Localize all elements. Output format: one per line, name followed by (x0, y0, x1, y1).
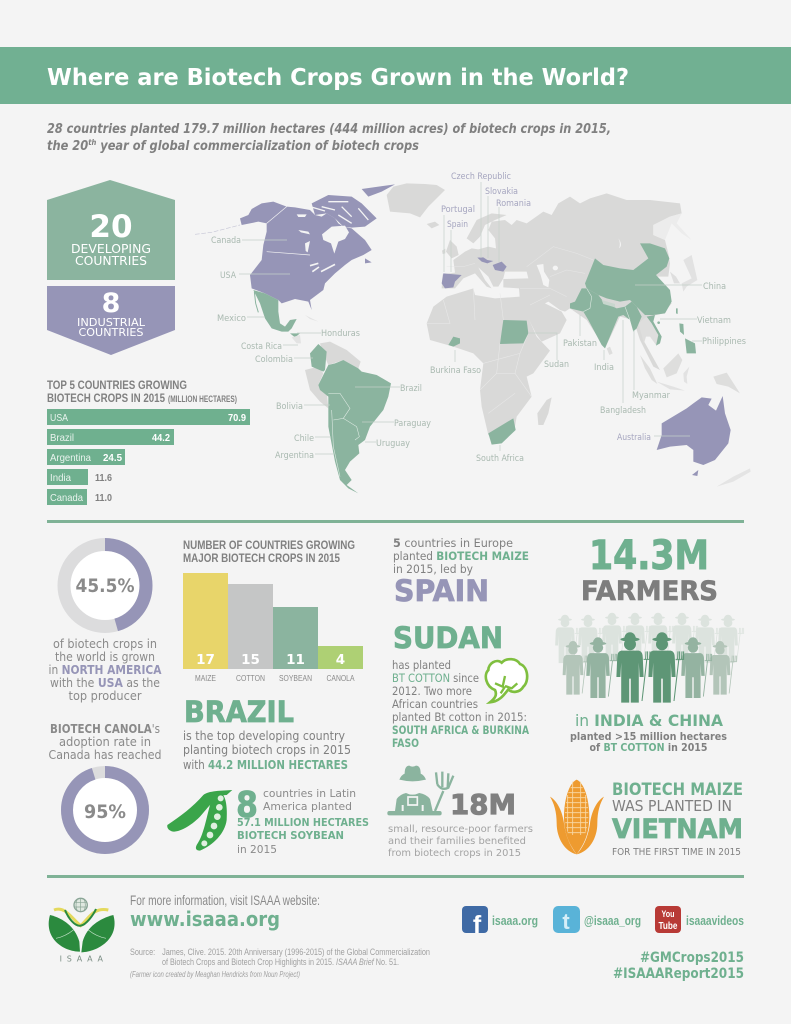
bar chart: top 5 countries: India (50, 472, 71, 484)
bar chart: top 5 countries: 24.5 (103, 452, 122, 464)
badge: developing countries (47, 180, 175, 280)
text: biotech canola: BIOTECH CANOLA's (50, 722, 160, 736)
callout: sudan: SUDAN (393, 621, 503, 655)
text: india and china (570, 711, 727, 754)
callout: 18M farmers: from biotech crops in 2015 (388, 848, 521, 859)
map: country labels: Colombia (255, 355, 293, 365)
heading: crops chart: NUMBER OF COUNTRIES GROWING (183, 538, 355, 552)
map: north america (195, 184, 395, 343)
icon: youtube: You (662, 909, 674, 919)
bar chart: top 5 countries: 70.9 (228, 412, 246, 424)
callout: 14.3M farmers: FARMERS (581, 576, 718, 607)
title banner: Where are Biotech Crops Grown in the World? (47, 63, 629, 91)
bar chart: crops: 15 (241, 652, 260, 668)
hashtags (613, 950, 744, 982)
icon: twitter (553, 906, 580, 934)
map: africa (427, 288, 751, 487)
map: south america (305, 342, 391, 493)
subtitle (47, 121, 611, 154)
footer: website (130, 892, 320, 931)
label: twitter: @isaaa_org (584, 913, 641, 928)
callout: 8 countries latin america: BIOTECH SOYBEAN (237, 829, 344, 842)
bar chart: crops: CANOLA (326, 673, 355, 683)
map: country labels: USA (220, 271, 236, 281)
hashtags: #ISAAAReport2015 (613, 966, 744, 982)
subtitle: th (88, 138, 97, 147)
callout: 18M farmers: 18M (450, 788, 516, 821)
map: country labels: Burkina Faso (430, 366, 481, 376)
map: africa biotech countries (448, 320, 528, 445)
badge: developing countries: COUNTRIES (75, 254, 147, 268)
callout: 8 countries latin america: 57.1 MILLION HECTARES (237, 816, 369, 829)
bar chart: top 5 countries: Argentina (50, 452, 91, 464)
heading: top 5 countries: (MILLION HECTARES) (168, 394, 237, 404)
logo: ISAAA: ISAAA (60, 955, 104, 964)
map: country labels: Bolivia (276, 402, 303, 412)
bar chart: crops: SOYBEAN (279, 673, 312, 683)
map: industrial countries europe and oceania (442, 257, 731, 476)
badge: industrial countries: COUNTRIES (78, 326, 144, 339)
icon: youtube: Tube (658, 920, 678, 932)
text: north america: top producer (68, 689, 142, 703)
callout: sudan (392, 621, 529, 750)
callout: 8 countries latin america: 8 (236, 785, 258, 826)
map: country labels: Philippines (702, 337, 747, 347)
text: north america: the world is grown (55, 650, 155, 664)
subtitle: year of global commercialization of biotech crops (96, 138, 419, 154)
text: biotech canola: Canada has reached (48, 748, 162, 762)
callout: sudan: BT COTTON since (392, 671, 479, 685)
callout: brazil: planting biotech crops in 2015 (183, 743, 351, 757)
callout: brazil: BRAZIL (184, 695, 294, 729)
callout: spain: 5 countries in Europe (393, 536, 513, 550)
map: china and south asia (570, 243, 696, 353)
bar chart: top 5 countries: 11.6 (95, 472, 112, 484)
map: country labels (211, 172, 747, 464)
callout: sudan: 2012. Two more (392, 684, 472, 698)
callout: spain: planted BIOTECH MAIZE (393, 549, 529, 563)
subtitle: 28 countries planted 179.7 million hectares (444 million acres) of biotech crops in 2015, (47, 121, 611, 137)
bar chart: crops (183, 573, 363, 683)
donut: 95% canola: 95% (84, 801, 126, 823)
badge: industrial countries: INDUSTRIAL (77, 316, 146, 329)
callout: spain (393, 536, 529, 608)
callout: 8 countries latin america: in 2015 (237, 843, 277, 856)
badge: industrial countries (47, 286, 175, 355)
callout: brazil: is the top developing country (183, 729, 345, 743)
icon: youtube (655, 906, 681, 933)
callout: vietnam: VIETNAM (612, 814, 743, 845)
map: leader lines (239, 182, 702, 454)
callout: brazil (183, 695, 351, 772)
map: country labels: Honduras (321, 329, 361, 339)
callout: brazil: with 44.2 MILLION HECTARES (183, 758, 348, 772)
logo: ISAAA (49, 898, 115, 964)
map: country labels: Costa Rica (241, 342, 282, 352)
icon: farmer with pitchfork (387, 766, 453, 815)
icon: cotton boll (486, 659, 527, 702)
icon: twitter: t (562, 909, 570, 934)
badge: developing countries: 20 (89, 209, 133, 245)
callout: sudan: FASO (392, 736, 419, 750)
callout: spain: in 2015, led by (393, 562, 473, 576)
map: country labels: Argentina (275, 451, 314, 461)
icon: corn cob (550, 780, 604, 854)
footer: source: of Biotech Crops and Biotech Crop Highlights in 2015. ISAAA Brief No. 51. (162, 957, 399, 967)
map: country labels: Pakistan (563, 339, 597, 349)
text: north america: of biotech crops in (53, 637, 157, 651)
map: country labels: Bangladesh (600, 406, 646, 416)
bar chart: top 5 countries: Canada (50, 492, 83, 504)
title banner (0, 47, 791, 104)
icon: facebook (462, 906, 488, 939)
bar chart: top 5 countries (47, 409, 250, 505)
map: eurasia and islands (387, 183, 682, 370)
bar chart: top 5 countries: 44.2 (152, 432, 170, 444)
callout: vietnam (612, 780, 743, 858)
map: country labels: Romania (496, 199, 531, 209)
bar chart: top 5 countries: USA (50, 412, 68, 424)
footer: source: (Farmer icon created by Meaghan Hendricks from Noun Project) (130, 970, 300, 979)
text: india and china: in INDIA & CHINA (575, 711, 724, 730)
callout: 8 countries latin america: America planted (263, 800, 352, 813)
map: country labels: Australia (617, 433, 651, 443)
text: north america: with the USA as the (50, 676, 160, 690)
callout: 8 countries latin america: countries in Latin (263, 787, 356, 800)
callout: sudan: African countries (392, 697, 478, 711)
map: country labels: Mexico (217, 314, 246, 324)
icon: soybean pod (167, 790, 232, 851)
map: country labels: Vietnam (697, 316, 731, 326)
map: country labels: Spain (447, 220, 468, 230)
hashtags: #GMCrops2015 (640, 950, 744, 966)
bar chart: crops: 4 (336, 652, 345, 668)
label: youtube: isaaavideos (686, 913, 744, 928)
map: country labels: Czech Republic (451, 172, 511, 182)
donut: 45.5% North America: 45.5% (76, 575, 134, 597)
heading: crops chart: MAJOR BIOTECH CROPS IN 2015 (183, 551, 340, 565)
world map (195, 172, 751, 493)
map: country labels: Slovakia (485, 187, 518, 197)
text: biotech canola: adoption rate in (59, 735, 151, 749)
callout: 8 countries latin america (236, 785, 369, 856)
heading: crops chart (183, 538, 355, 565)
map: country labels: Paraguay (394, 419, 431, 429)
map: far east islands and indonesia (607, 213, 740, 393)
map: country labels: Chile (294, 434, 314, 444)
text: india and china: of BT COTTON in 2015 (590, 741, 708, 754)
heading: top 5 countries: TOP 5 COUNTRIES GROWING (47, 378, 187, 392)
footer: source: Source: James, Clive. 2015. 20th Anniversary (1996-2015) of the Global Commercialization (130, 947, 430, 957)
bar chart: crops: COTTON (236, 673, 265, 683)
bar chart: crops: 17 (196, 652, 215, 668)
map: country labels: Myanmar (632, 391, 670, 401)
badge: industrial countries: 8 (102, 288, 120, 319)
text: north america: in NORTH AMERICA (48, 663, 162, 677)
callout: spain: SPAIN (394, 574, 489, 608)
callout: 18M farmers: small, resource-poor farmers (388, 824, 533, 835)
map: country labels: Uruguay (376, 439, 410, 449)
map: seas (537, 238, 621, 287)
callout: sudan: planted Bt cotton in 2015: (392, 710, 527, 724)
callout: 18M farmers (388, 788, 533, 859)
map: country labels: South Africa (476, 454, 524, 464)
subtitle: the 20 (47, 138, 96, 154)
text: north america (48, 637, 162, 703)
map: asia borders (447, 247, 593, 305)
callout: vietnam: WAS PLANTED IN (612, 797, 732, 815)
map: country labels: Canada (211, 236, 241, 246)
donut: 95% canola (67, 772, 143, 848)
callout: 18M farmers: and their families benefited (388, 836, 526, 847)
footer: website: For more information, visit ISAAA website: (130, 892, 320, 908)
map: country labels: Brazil (400, 384, 422, 394)
bar chart: top 5 countries: 11.0 (95, 492, 112, 504)
callout: 14.3M farmers: 14.3M (589, 533, 709, 579)
callout: sudan: has planted (392, 658, 451, 672)
bar chart: top 5 countries: Brazil (50, 432, 74, 444)
heading: top 5 countries (47, 378, 237, 405)
icon: facebook: f (473, 911, 482, 939)
map: country labels: Portugal (441, 205, 475, 215)
footer: website: www.isaaa.org (130, 907, 280, 931)
footer: source (130, 947, 430, 979)
text: biotech canola (48, 722, 162, 762)
bar chart: crops: MAIZE (195, 673, 216, 683)
callout: vietnam: FOR THE FIRST TIME IN 2015 (612, 847, 741, 858)
map: country labels: Sudan (544, 360, 569, 370)
icon: crowd of farmers (555, 613, 744, 703)
donut: 45.5% North America (64, 544, 146, 626)
text: india and china: planted >15 million hectares (570, 730, 727, 743)
badge: developing countries: DEVELOPING (71, 242, 151, 256)
heading: top 5 countries: BIOTECH CROPS IN 2015 (47, 391, 165, 405)
callout: 14.3M farmers (581, 533, 718, 607)
bar chart: crops: 11 (286, 652, 305, 668)
map: country labels: India (594, 363, 614, 373)
label: facebook: isaaa.org (492, 913, 538, 928)
map: country labels: China (703, 282, 726, 292)
callout: vietnam: BIOTECH MAIZE (612, 780, 743, 800)
callout: sudan: SOUTH AFRICA & BURKINA (392, 723, 529, 737)
